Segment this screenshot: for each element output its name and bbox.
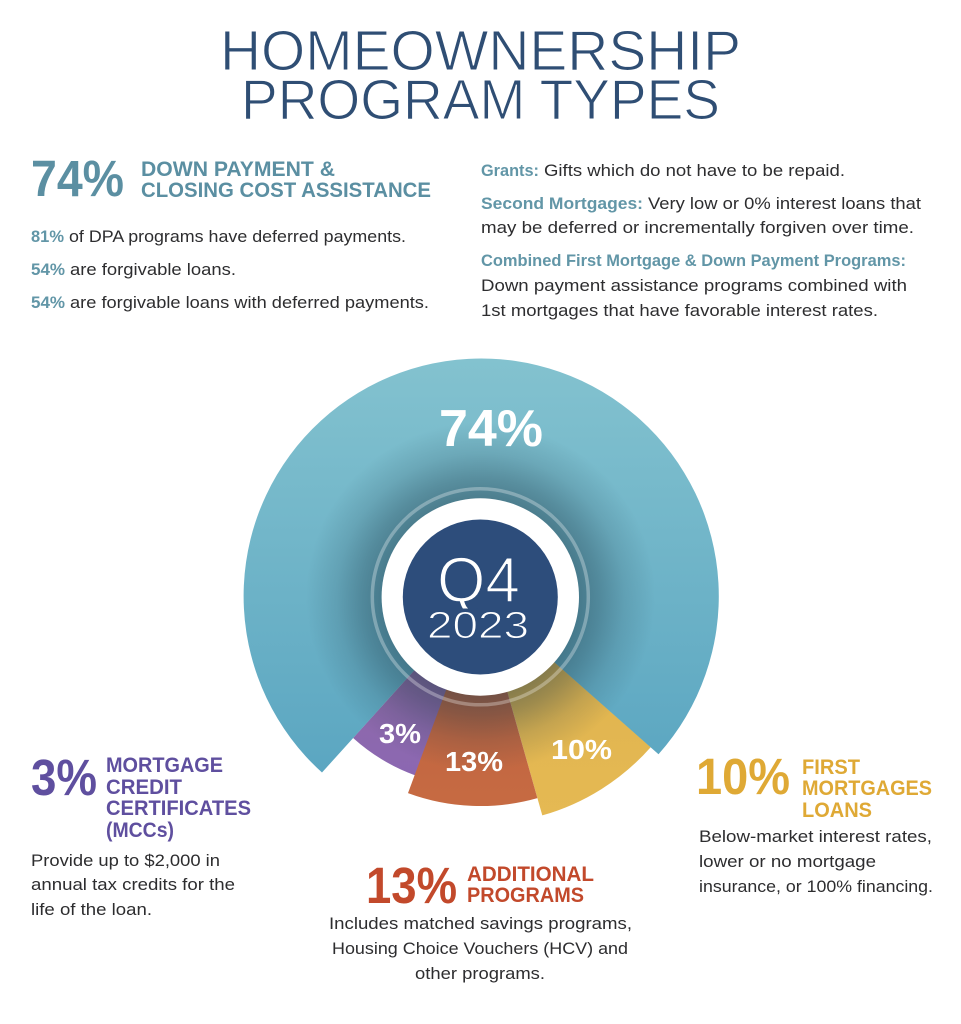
panel: program definitions xyxy=(481,161,921,320)
heading: 3% MCCs xyxy=(31,749,251,842)
heading: 10% first mortgages xyxy=(696,748,932,822)
slice labels xyxy=(379,400,612,777)
panel: down payment and closing cost assistance xyxy=(31,150,431,312)
heading: 13% additional programs xyxy=(366,857,594,914)
text block: DPA statistics: 54% xyxy=(31,293,65,312)
title: PROGRAM TYPES xyxy=(241,68,720,132)
heading: 74% down payment xyxy=(31,150,431,207)
panel: program definitions: Grants: xyxy=(481,161,539,180)
slice: 13% additional programs xyxy=(408,597,537,806)
heading: 74% down payment: CLOSING COST ASSISTANCE xyxy=(141,179,431,202)
text block: DPA statistics: are forgivable loans. xyxy=(70,260,236,279)
heading: 13% additional programs: ADDITIONAL xyxy=(467,863,594,886)
panel: program definitions: Gifts which do not have to be repaid. xyxy=(544,161,845,180)
navy center badge: Q4 xyxy=(437,544,520,616)
title: HOMEOWNERSHIP xyxy=(220,19,741,83)
description: life of the loan. xyxy=(31,900,152,919)
heading: 13% additional programs: 13% xyxy=(366,857,457,914)
panel: 3% mortgage credit certificates xyxy=(31,749,251,919)
panel: program definitions: Second Mortgages: xyxy=(481,194,643,213)
slice: 3% mortgage credit certificates xyxy=(353,597,480,776)
description: lower or no mortgage xyxy=(699,852,876,871)
heading: 10% first mortgages: LOANS xyxy=(802,799,872,822)
heading: 3% MCCs: 3% xyxy=(31,749,97,806)
description: insurance, or 100% financing. xyxy=(699,877,933,896)
heading: 3% MCCs: CREDIT xyxy=(106,776,182,799)
slice labels: 10% xyxy=(551,734,612,765)
panel: program definitions: 1st mortgages that have favorable interest rates. xyxy=(481,301,878,320)
white center circle xyxy=(382,498,579,696)
text block: DPA statistics: 81% xyxy=(31,227,64,246)
description: Housing Choice Vouchers (HCV) and xyxy=(332,939,628,958)
panel: 13% additional programs xyxy=(329,857,632,983)
heading: 10% first mortgages: FIRST xyxy=(802,756,860,779)
description xyxy=(329,914,632,983)
title xyxy=(220,19,741,132)
heading: 3% MCCs: CERTIFICATES xyxy=(106,797,251,820)
panel: 10% first mortgages loans xyxy=(696,748,933,896)
description: Provide up to $2,000 in xyxy=(31,851,220,870)
ring xyxy=(372,489,588,705)
heading: 74% down payment: 74% xyxy=(31,150,124,207)
radial chart xyxy=(244,359,719,815)
center shadow xyxy=(300,417,660,777)
text block: DPA statistics xyxy=(31,227,429,312)
description xyxy=(31,851,235,919)
panel: program definitions: may be deferred or incrementally forgiven over time. xyxy=(481,218,914,237)
text block: DPA statistics: of DPA programs have deferred payments. xyxy=(69,227,406,246)
slice labels: 74% xyxy=(439,400,543,458)
slice: 10% first mortgages xyxy=(480,597,651,815)
slice labels: 3% xyxy=(379,718,421,749)
heading: 10% first mortgages: 10% xyxy=(696,748,790,805)
heading: 13% additional programs: PROGRAMS xyxy=(467,884,584,907)
slice labels: 13% xyxy=(445,746,503,777)
navy center badge: 2023 xyxy=(427,605,529,647)
panel: program definitions: Very low or 0% interest loans that xyxy=(648,194,921,213)
heading: 10% first mortgages: MORTGAGES xyxy=(802,777,932,800)
description: Below-market interest rates, xyxy=(699,827,932,846)
navy center badge xyxy=(403,520,558,674)
heading: 3% MCCs: MORTGAGE xyxy=(106,754,223,777)
description xyxy=(699,827,933,896)
panel: program definitions: Combined First Mortgage & Down Payment Programs: xyxy=(481,251,906,270)
heading: 74% down payment: DOWN PAYMENT & xyxy=(141,158,335,181)
heading: 3% MCCs: (MCCs) xyxy=(106,819,174,842)
panel: program definitions: Down payment assistance programs combined with xyxy=(481,276,907,295)
text block: DPA statistics: 54% xyxy=(31,260,65,279)
description: Includes matched savings programs, xyxy=(329,914,632,933)
description: other programs. xyxy=(415,964,545,983)
description: annual tax credits for the xyxy=(31,875,235,894)
slice: 74% down payment assistance xyxy=(244,359,719,772)
text block: DPA statistics: are forgivable loans with deferred payments. xyxy=(70,293,429,312)
